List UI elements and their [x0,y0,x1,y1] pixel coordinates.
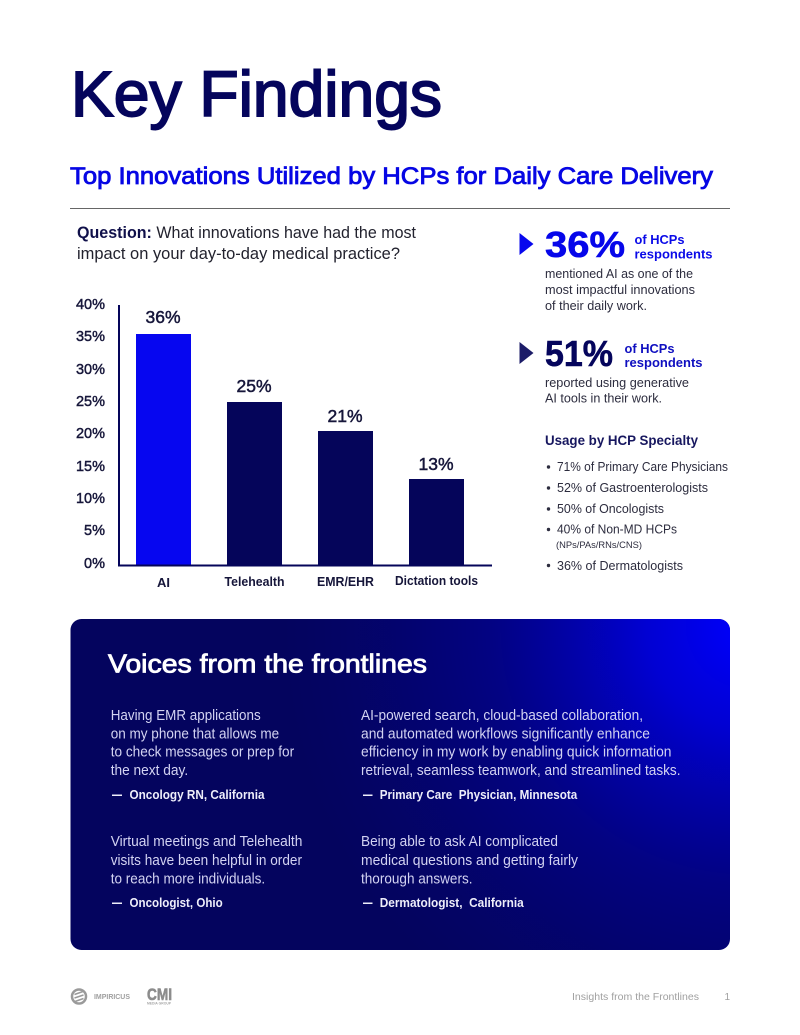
quote: oncologist: Oncologist, Ohio [130,896,223,910]
quote: dermatologist: thorough answers. [361,872,472,888]
usage by specialty list [545,433,728,573]
quote: dermatologist: Dermatologist, California [380,896,525,910]
footer label: Insights from the Frontlines [572,992,699,1003]
logo: CMI Media Group: CMI [147,985,172,1004]
stat label [624,341,702,370]
quote: oncologist: to reach more individuals. [111,872,265,888]
quote: oncologist [111,834,302,910]
quote: oncologist: Virtual meetings and Telehealth [111,834,302,850]
y axis labels: 35% [76,329,105,345]
list items: 71% of Primary Care Physicians [557,459,728,474]
quote: oncology RN: on my phone that allows me [111,726,279,742]
list items: 52% of Gastroenterologists [557,480,708,495]
stat callout: 36% [520,224,712,313]
survey question [77,223,416,263]
logo: Impiricus: IMPIRICUS [94,992,130,1001]
footer [72,985,730,1006]
stat description: most impactful innovations [545,282,695,297]
list items: 40% of Non-MD HCPs [557,522,677,536]
category labels: Dictation tools [395,574,478,588]
category labels [157,574,478,590]
logo: Impiricus [72,990,130,1004]
quote: primary care physician: Primary Care Physician, Minnesota [380,788,578,802]
stat description: AI tools in their work. [545,390,662,406]
stat label [634,232,712,262]
stat description: of their daily work. [545,298,647,313]
quote: oncology RN: to check messages or prep for [111,744,294,760]
y axis labels [76,297,105,572]
list items: 50% of Oncologists [557,501,664,516]
y axis labels: 15% [76,459,105,475]
panel heading: Voices from the frontlines [108,648,427,678]
bar value labels: 13% [418,454,454,474]
y axis labels: 30% [76,362,105,378]
list heading: Usage by HCP Specialty [545,433,698,448]
quote: primary care physician: efficiency in my work by enabling quick information [361,744,672,760]
stat callout: 51% [520,333,702,406]
stat label: respondents [624,355,702,370]
icon: arrow [520,342,534,364]
list items [547,459,728,573]
bar value labels: 36% [145,307,181,327]
list items: 36% of Dermatologists [557,558,683,573]
quote: oncology RN: Having EMR applications [111,708,261,724]
stat number: 51% [545,333,613,374]
stat description: reported using generative [545,375,689,390]
quote: primary care physician: retrieval, seamless teamwork, and streamlined tasks. [361,763,680,779]
logo: CMI Media Group: MEDIA GROUP [147,1002,172,1006]
quote: oncologist: visits have been helpful in order [111,853,302,869]
bar value labels [145,307,454,474]
stat description: mentioned AI as one of the [545,266,693,281]
bar value labels: 25% [236,376,272,396]
list items: (NPs/PAs/RNs/CNS) [556,540,642,550]
quote: dermatologist: medical questions and getting fairly [361,853,579,869]
stat label: of HCPs [624,341,674,356]
bar: Telehealth 25% [227,402,282,565]
y axis labels: 20% [76,426,105,442]
bar value labels: 21% [327,406,363,426]
panel: voices from the frontlines [70,619,730,950]
y axis labels: 25% [76,394,105,410]
stat label: of HCPs [634,232,684,247]
bar: AI 36% [136,334,191,565]
quote: dermatologist: Being able to ask AI complicated [361,834,558,850]
y axis labels: 40% [76,297,105,313]
survey question: impact on your day-to-day medical practice? [77,244,400,263]
quote: oncology RN [111,708,294,802]
category labels: Telehealth [224,575,284,589]
icon: arrow [520,233,534,255]
y axis labels: 5% [84,523,105,539]
page number: 1 [724,992,730,1003]
category labels: EMR/EHR [317,575,374,589]
bar chart [76,297,492,590]
quote: primary care physician [361,708,680,802]
survey question: Question: What innovations have had the most [77,223,416,242]
bar: EMR/EHR 21% [318,431,373,565]
stat label: respondents [634,246,712,262]
stat description [545,375,689,406]
category labels: AI [157,576,170,590]
y axis labels: 0% [84,556,105,572]
axes [119,305,492,566]
stat description [545,266,695,313]
quote: primary care physician: AI-powered search, cloud-based collaboration, [361,708,643,724]
stat number: 36% [545,224,625,265]
bar: Dictation tools 13% [409,479,464,565]
y axis labels: 10% [76,491,105,507]
quote: primary care physician: and automated workflows significantly enhance [361,726,650,742]
title: Key Findings [71,58,442,130]
subtitle: Top Innovations Utilized by HCPs for Daily Care Delivery [70,163,714,190]
quote: dermatologist [361,834,579,910]
quote: oncology RN: Oncology RN, California [130,788,265,802]
quote: oncology RN: the next day. [111,763,188,779]
